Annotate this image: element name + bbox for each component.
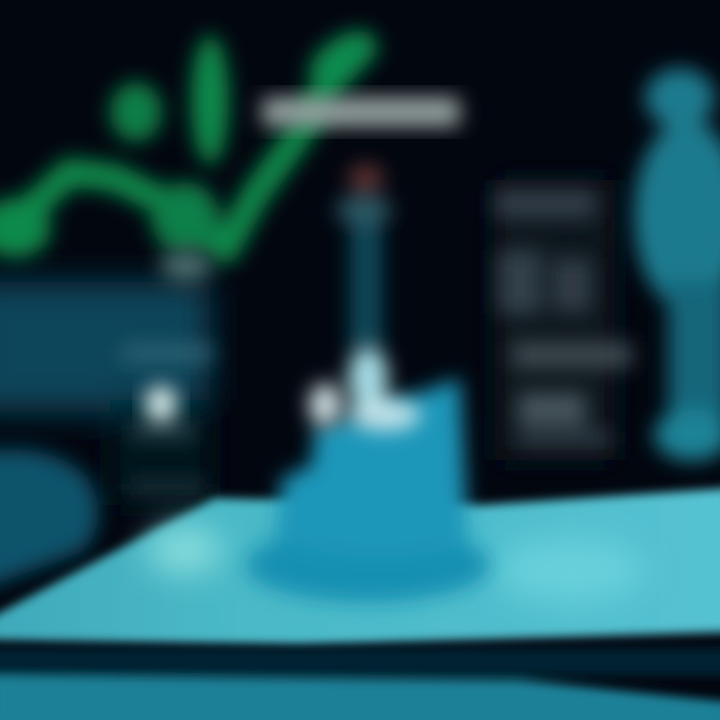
central column: [336, 164, 392, 350]
left text block: [122, 250, 212, 494]
table surface: [0, 488, 720, 645]
table front band: [0, 648, 720, 720]
statue silhouette: [634, 68, 720, 461]
table highlights: [147, 526, 645, 602]
white highlights on cake: [309, 346, 421, 431]
icon: white dot: [145, 385, 177, 423]
panel: left dark teal block: [0, 282, 210, 505]
right text lines: [495, 190, 632, 446]
icon: left teal rounded object: [0, 449, 99, 590]
icon: green growth plant: [0, 20, 385, 258]
right text block: [495, 180, 615, 460]
heading: [262, 97, 460, 127]
central teal cake: [246, 378, 490, 602]
